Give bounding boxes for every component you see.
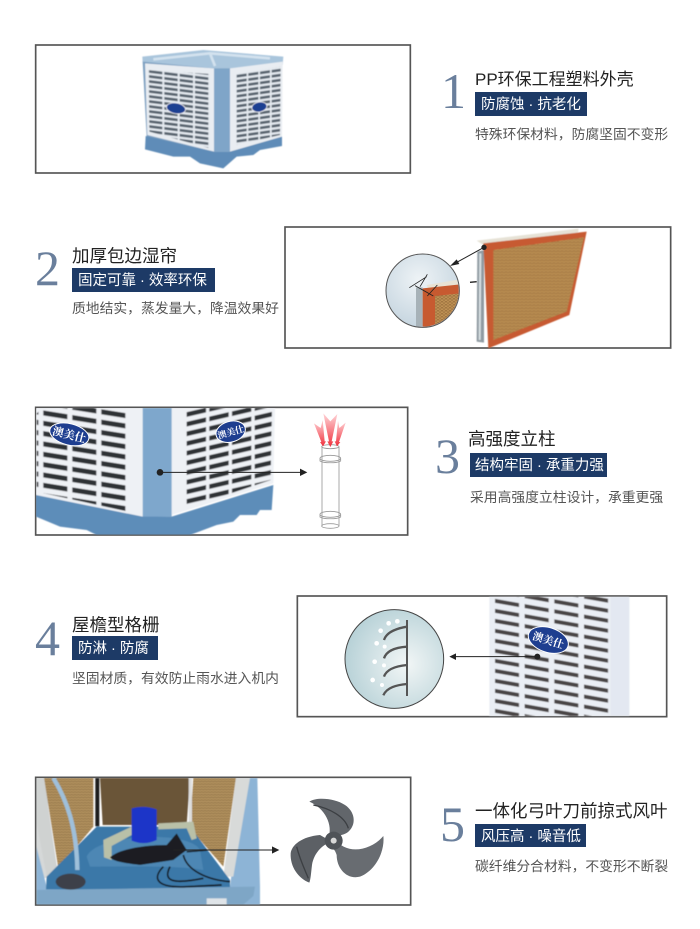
cooler unit — [142, 50, 283, 168]
numeral 5: 5 — [440, 796, 465, 852]
description 4: 坚固材质，有效防止雨水进入机内 — [72, 671, 279, 686]
tag 4: 防淋 · 防腐 — [78, 639, 149, 657]
tag 2 — [72, 268, 215, 292]
tag 5 — [475, 824, 586, 847]
tag 3: 结构牢固 · 承重力强 — [475, 457, 604, 474]
detail magnifier circle — [386, 254, 460, 330]
detail circle — [345, 610, 444, 708]
panel 2: cooling pad photo — [285, 227, 671, 348]
panel 3: column photo — [36, 407, 408, 535]
numeral 3: 3 — [435, 428, 460, 484]
numeral 2: 2 — [35, 240, 60, 296]
cooling pad — [477, 229, 587, 348]
tag 3 — [470, 453, 607, 477]
cooler close-up: 澳美仕 — [51, 424, 88, 446]
numeral 4: 4 — [35, 610, 60, 666]
arrows to detail — [450, 245, 487, 282]
panel 1: cooler exterior photo — [36, 45, 410, 173]
description 1: 特殊环保材料，防腐坚固不变形 — [475, 126, 668, 142]
arrow to fan — [173, 846, 279, 854]
louver close-up: 澳美仕 — [531, 629, 566, 652]
heading 1: PP环保工程塑料外壳 — [475, 70, 634, 89]
heading 3: 高强度立柱 — [468, 429, 556, 449]
tag 2: 固定可靠 · 效率环保 — [78, 272, 207, 289]
tag 4 — [72, 636, 158, 660]
numeral 1: 1 — [441, 63, 466, 119]
description 3: 采用高强度立柱设计，承重更强 — [470, 489, 663, 505]
icon: three-blade fan — [291, 799, 384, 883]
panel 5: motor and fan photo — [36, 777, 411, 905]
heading 4: 屋檐型格栅 — [72, 615, 160, 635]
louver close-up — [489, 597, 629, 716]
tag 1: 防腐蚀 · 抗老化 — [481, 95, 581, 113]
arrow to column — [157, 469, 307, 476]
column diagram with red force arrows — [314, 413, 346, 528]
tag 1 — [475, 92, 587, 116]
heading 2: 加厚包边湿帘 — [72, 246, 177, 266]
description 5: 碳纤维分合材料，不变形不断裂 — [475, 859, 668, 874]
heading 5: 一体化弓叶刀前掠式风叶 — [475, 801, 668, 821]
arrow to detail — [449, 653, 540, 660]
panel 4: louver photo — [297, 596, 667, 717]
description 2: 质地结实，蒸发量大，降温效果好 — [72, 301, 279, 316]
tag 5: 风压高 · 噪音低 — [481, 828, 581, 845]
cooler interior — [36, 778, 260, 905]
cooler close-up — [36, 408, 275, 535]
cooler close-up: 澳美仕 — [216, 423, 245, 441]
